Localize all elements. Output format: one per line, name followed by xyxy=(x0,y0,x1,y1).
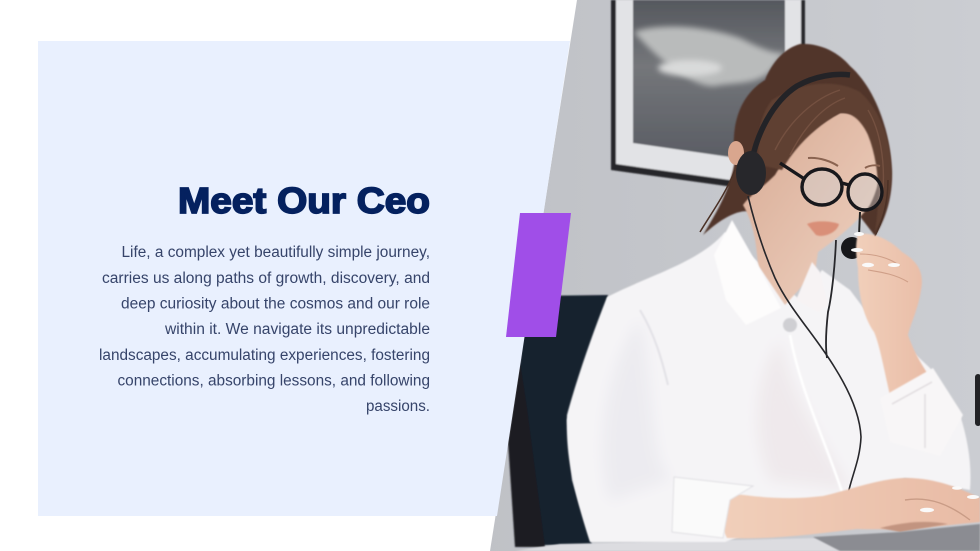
purple accent parallelogram xyxy=(506,213,571,337)
laptop xyxy=(813,524,980,551)
panel: light text background xyxy=(38,41,570,516)
fingernails xyxy=(851,232,900,267)
desk xyxy=(519,538,839,551)
body text block: connections, absorbing lessons, and following xyxy=(118,372,430,390)
rolled right sleeve xyxy=(889,368,964,448)
body text block: landscapes, accumulating experiences, fostering xyxy=(99,347,430,364)
hair back xyxy=(703,44,892,236)
chair xyxy=(508,295,608,547)
headset xyxy=(736,74,863,494)
finger shadows xyxy=(880,522,948,532)
forearm and typing hand xyxy=(721,478,980,538)
framed picture on wall xyxy=(611,0,805,197)
ear xyxy=(728,141,744,165)
far right object xyxy=(975,374,980,426)
eyebrows xyxy=(808,158,880,168)
white shirt xyxy=(567,232,971,542)
body text block: within it. We navigate its unpredictable xyxy=(164,321,430,338)
wall background xyxy=(480,0,980,551)
loose hair strands by neck xyxy=(700,170,888,238)
glasses xyxy=(780,163,882,210)
body text block: deep curiosity about the cosmos and our role xyxy=(121,296,430,312)
hair strands xyxy=(775,90,883,190)
body text block xyxy=(99,244,430,415)
title: Meet Our Ceo xyxy=(178,180,430,221)
raised hand xyxy=(855,233,927,393)
body text block: Life, a complex yet beautifully simple journey, xyxy=(122,244,430,261)
finger creases xyxy=(860,254,908,282)
lips xyxy=(807,221,839,236)
photo: woman with headset at laptop xyxy=(480,0,980,551)
neck and face xyxy=(743,113,881,305)
hair front xyxy=(758,84,891,232)
collar xyxy=(714,220,828,332)
typing fingernails xyxy=(920,486,979,512)
body text block: carries us along paths of growth, discovery, and xyxy=(102,270,430,287)
left shirt cuff xyxy=(672,477,753,538)
body text block: passions. xyxy=(366,398,430,415)
